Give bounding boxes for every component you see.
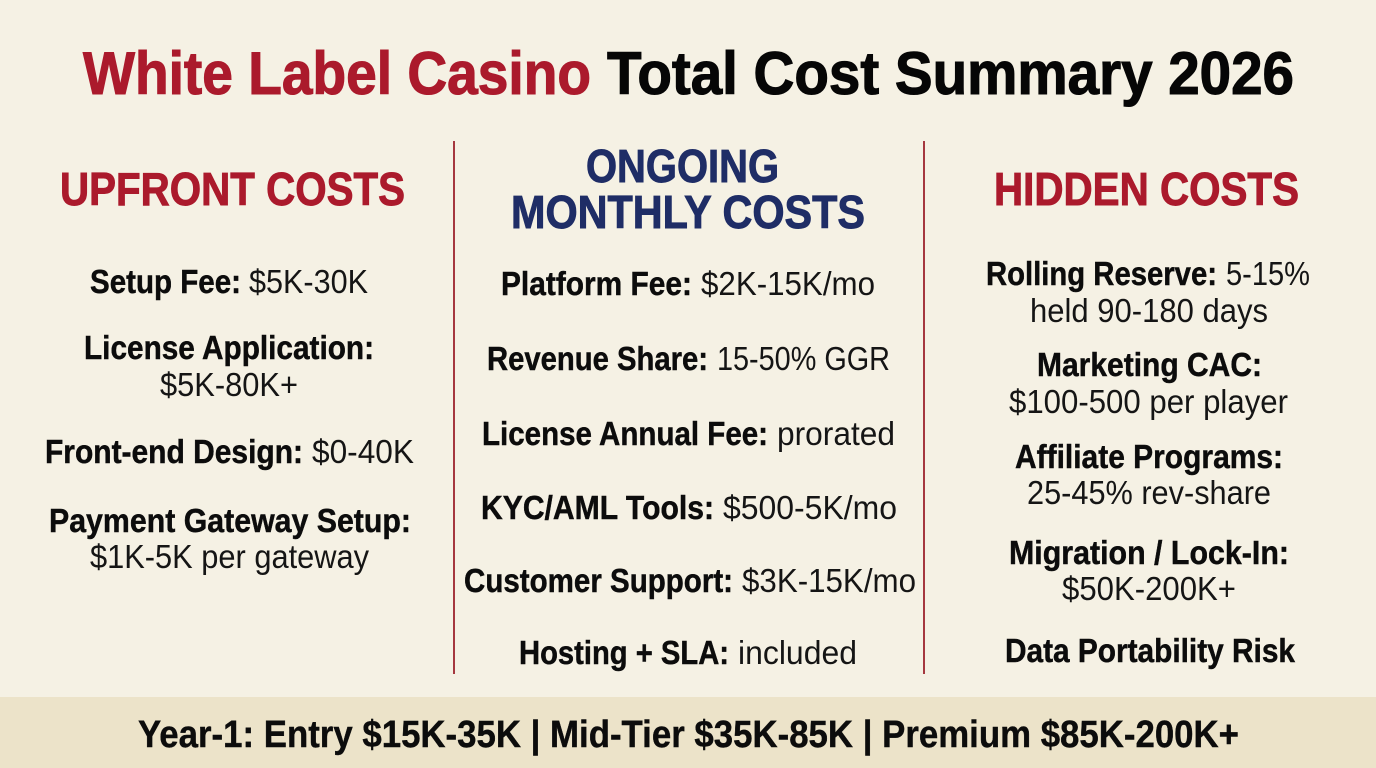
item: rolling reserve xyxy=(986,255,1310,329)
item: affiliate programs: Affiliate Programs: xyxy=(1015,438,1283,475)
item: front-end design: $0-40K xyxy=(312,433,414,470)
item: customer support: $3K-15K/mo xyxy=(742,562,916,599)
item: hosting + sla: included xyxy=(738,634,857,671)
item: rolling reserve: Rolling Reserve: xyxy=(986,255,1217,292)
item: payment gateway setup xyxy=(49,502,411,575)
item: kyc/aml tools: $500-5K/mo xyxy=(723,489,897,526)
item: revenue share: Revenue Share: xyxy=(487,340,708,377)
heading: ongoing monthly costs xyxy=(511,140,865,238)
title: Total Cost Summary 2026 xyxy=(607,40,1294,107)
panel: upfront costs xyxy=(45,163,414,575)
item: platform fee: Platform Fee: xyxy=(501,265,692,302)
item: revenue share: 15-50% GGR xyxy=(717,340,890,377)
item: affiliate programs: 25-45% rev-share xyxy=(1027,474,1271,511)
item: migration / lock-in: $50K-200K+ xyxy=(1062,570,1236,607)
item: hosting + sla: Hosting + SLA: xyxy=(519,634,729,671)
item: front-end design: Front-end Design: xyxy=(45,433,303,470)
item: marketing cac xyxy=(1009,346,1288,420)
item: license application: $5K-80K+ xyxy=(160,366,298,403)
title xyxy=(83,40,1294,107)
item: setup fee: $5K-30K xyxy=(249,263,368,300)
panel: hidden costs xyxy=(986,163,1310,669)
item: license application: License Application: xyxy=(84,329,374,366)
item: customer support xyxy=(464,562,916,599)
item: license application xyxy=(84,329,374,403)
item: kyc/aml tools xyxy=(481,489,897,526)
item: migration / lock-in: Migration / Lock-In: xyxy=(1009,534,1289,571)
item: payment gateway setup: Payment Gateway Setup: xyxy=(49,502,411,539)
item: payment gateway setup: $1K-5K per gateway xyxy=(90,538,369,575)
heading: ongoing monthly costs: MONTHLY COSTS xyxy=(511,186,865,238)
summary text: Year-1: Entry $15K-35K | Mid-Tier $35K-85K | Premium $85K-200K+ xyxy=(138,714,1239,756)
item: platform fee: $2K-15K/mo xyxy=(701,265,875,302)
heading: hidden costs: HIDDEN COSTS xyxy=(994,163,1299,215)
item: license annual fee: prorated xyxy=(777,415,895,452)
heading: upfront costs: UPFRONT COSTS xyxy=(60,163,405,215)
item: license annual fee: License Annual Fee: xyxy=(482,415,768,452)
item: marketing cac: $100-500 per player xyxy=(1009,383,1288,420)
item: rolling reserve: 5-15% xyxy=(1226,255,1310,292)
item: kyc/aml tools: KYC/AML Tools: xyxy=(481,489,714,526)
title: White Label Casino xyxy=(83,40,591,107)
panel: ongoing monthly costs xyxy=(464,140,916,671)
item: data portability risk: Data Portability Risk xyxy=(1005,632,1296,669)
item: migration / lock-in xyxy=(1009,534,1289,607)
item: platform fee xyxy=(501,265,875,302)
summary band xyxy=(0,697,1376,768)
item: rolling reserve: held 90-180 days xyxy=(1030,292,1268,329)
item: marketing cac: Marketing CAC: xyxy=(1037,346,1262,383)
heading: ongoing monthly costs: ONGOING xyxy=(586,140,779,192)
item: setup fee xyxy=(90,263,368,300)
item: revenue share xyxy=(487,340,890,377)
item: affiliate programs xyxy=(1015,438,1283,511)
item: customer support: Customer Support: xyxy=(464,562,733,599)
item: setup fee: Setup Fee: xyxy=(90,263,241,300)
